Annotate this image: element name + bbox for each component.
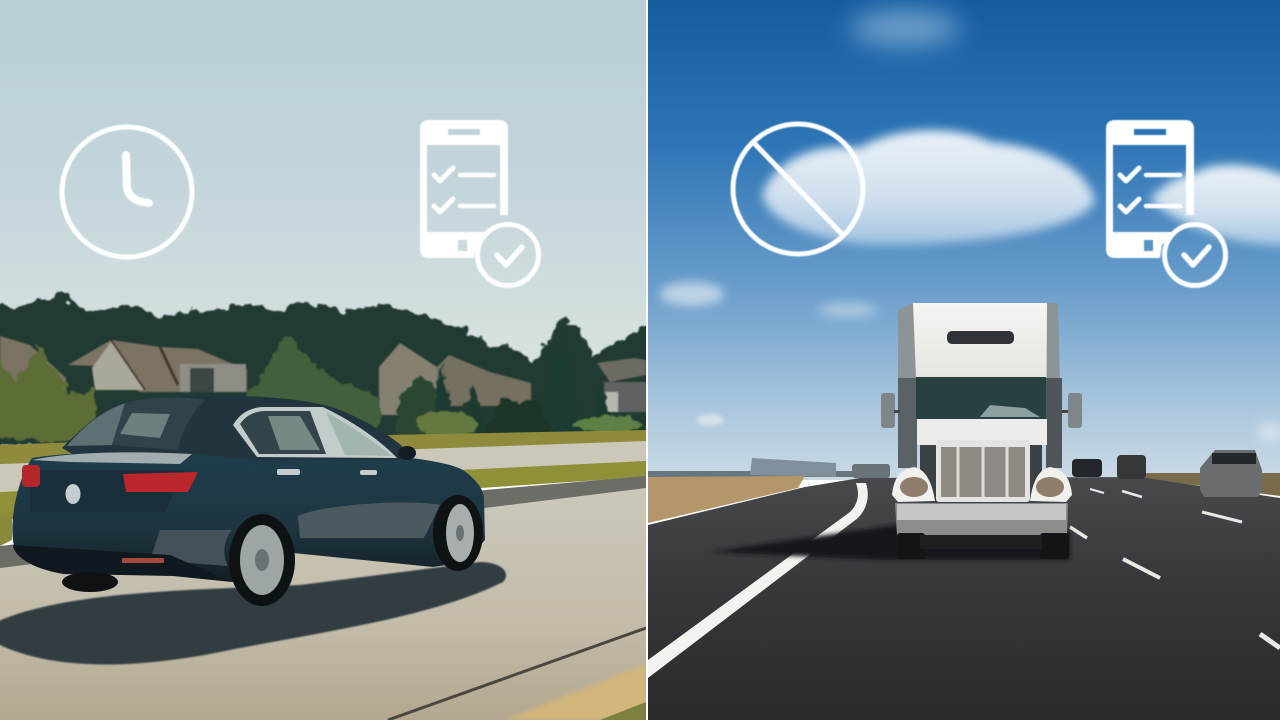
- clouds: [660, 10, 1280, 442]
- side stacks: [898, 303, 916, 378]
- icon: clock: [62, 127, 192, 257]
- side mirror: [398, 446, 416, 460]
- windshield: [916, 377, 1046, 419]
- car badge: [66, 484, 80, 504]
- car door handles: [277, 469, 300, 475]
- grass and back road: [0, 430, 646, 466]
- car: [12, 396, 485, 606]
- trailer: [912, 303, 1047, 379]
- headlights: [892, 467, 935, 502]
- icon: phone checklist: [1106, 120, 1226, 286]
- car roof and windows: [62, 396, 404, 460]
- truck shadow: [710, 525, 1070, 560]
- icon: phone checklist: [420, 120, 538, 286]
- distant structures: [750, 458, 836, 477]
- car body: [12, 452, 485, 582]
- houses: [0, 336, 646, 415]
- field: [648, 476, 805, 523]
- wheels: [897, 533, 925, 559]
- solid white edge line: [648, 483, 868, 678]
- panel: left scene with car: [0, 0, 660, 720]
- wheels: [62, 495, 483, 606]
- distant vehicles: [852, 450, 1262, 497]
- foreground trees: [0, 330, 642, 442]
- right road: [648, 477, 1280, 720]
- horizon band: [648, 471, 853, 477]
- left sky: [0, 0, 646, 450]
- right shoulder: [1140, 473, 1280, 496]
- divider: [646, 0, 648, 720]
- panel: right scene with truck: [648, 0, 1280, 720]
- road edge lines: [388, 628, 646, 720]
- icon: prohibited sign: [733, 124, 863, 254]
- mirrors: [881, 393, 895, 428]
- hood: [917, 419, 1047, 445]
- car shadow: [0, 562, 506, 664]
- tail lights: [22, 465, 40, 487]
- bumper: [895, 503, 1068, 535]
- tree line: [0, 295, 660, 445]
- truck: [881, 303, 1082, 559]
- lane dashes: [1070, 489, 1280, 648]
- right sky: [648, 0, 1280, 480]
- lower side panel: [298, 503, 440, 538]
- grille: [936, 440, 1030, 502]
